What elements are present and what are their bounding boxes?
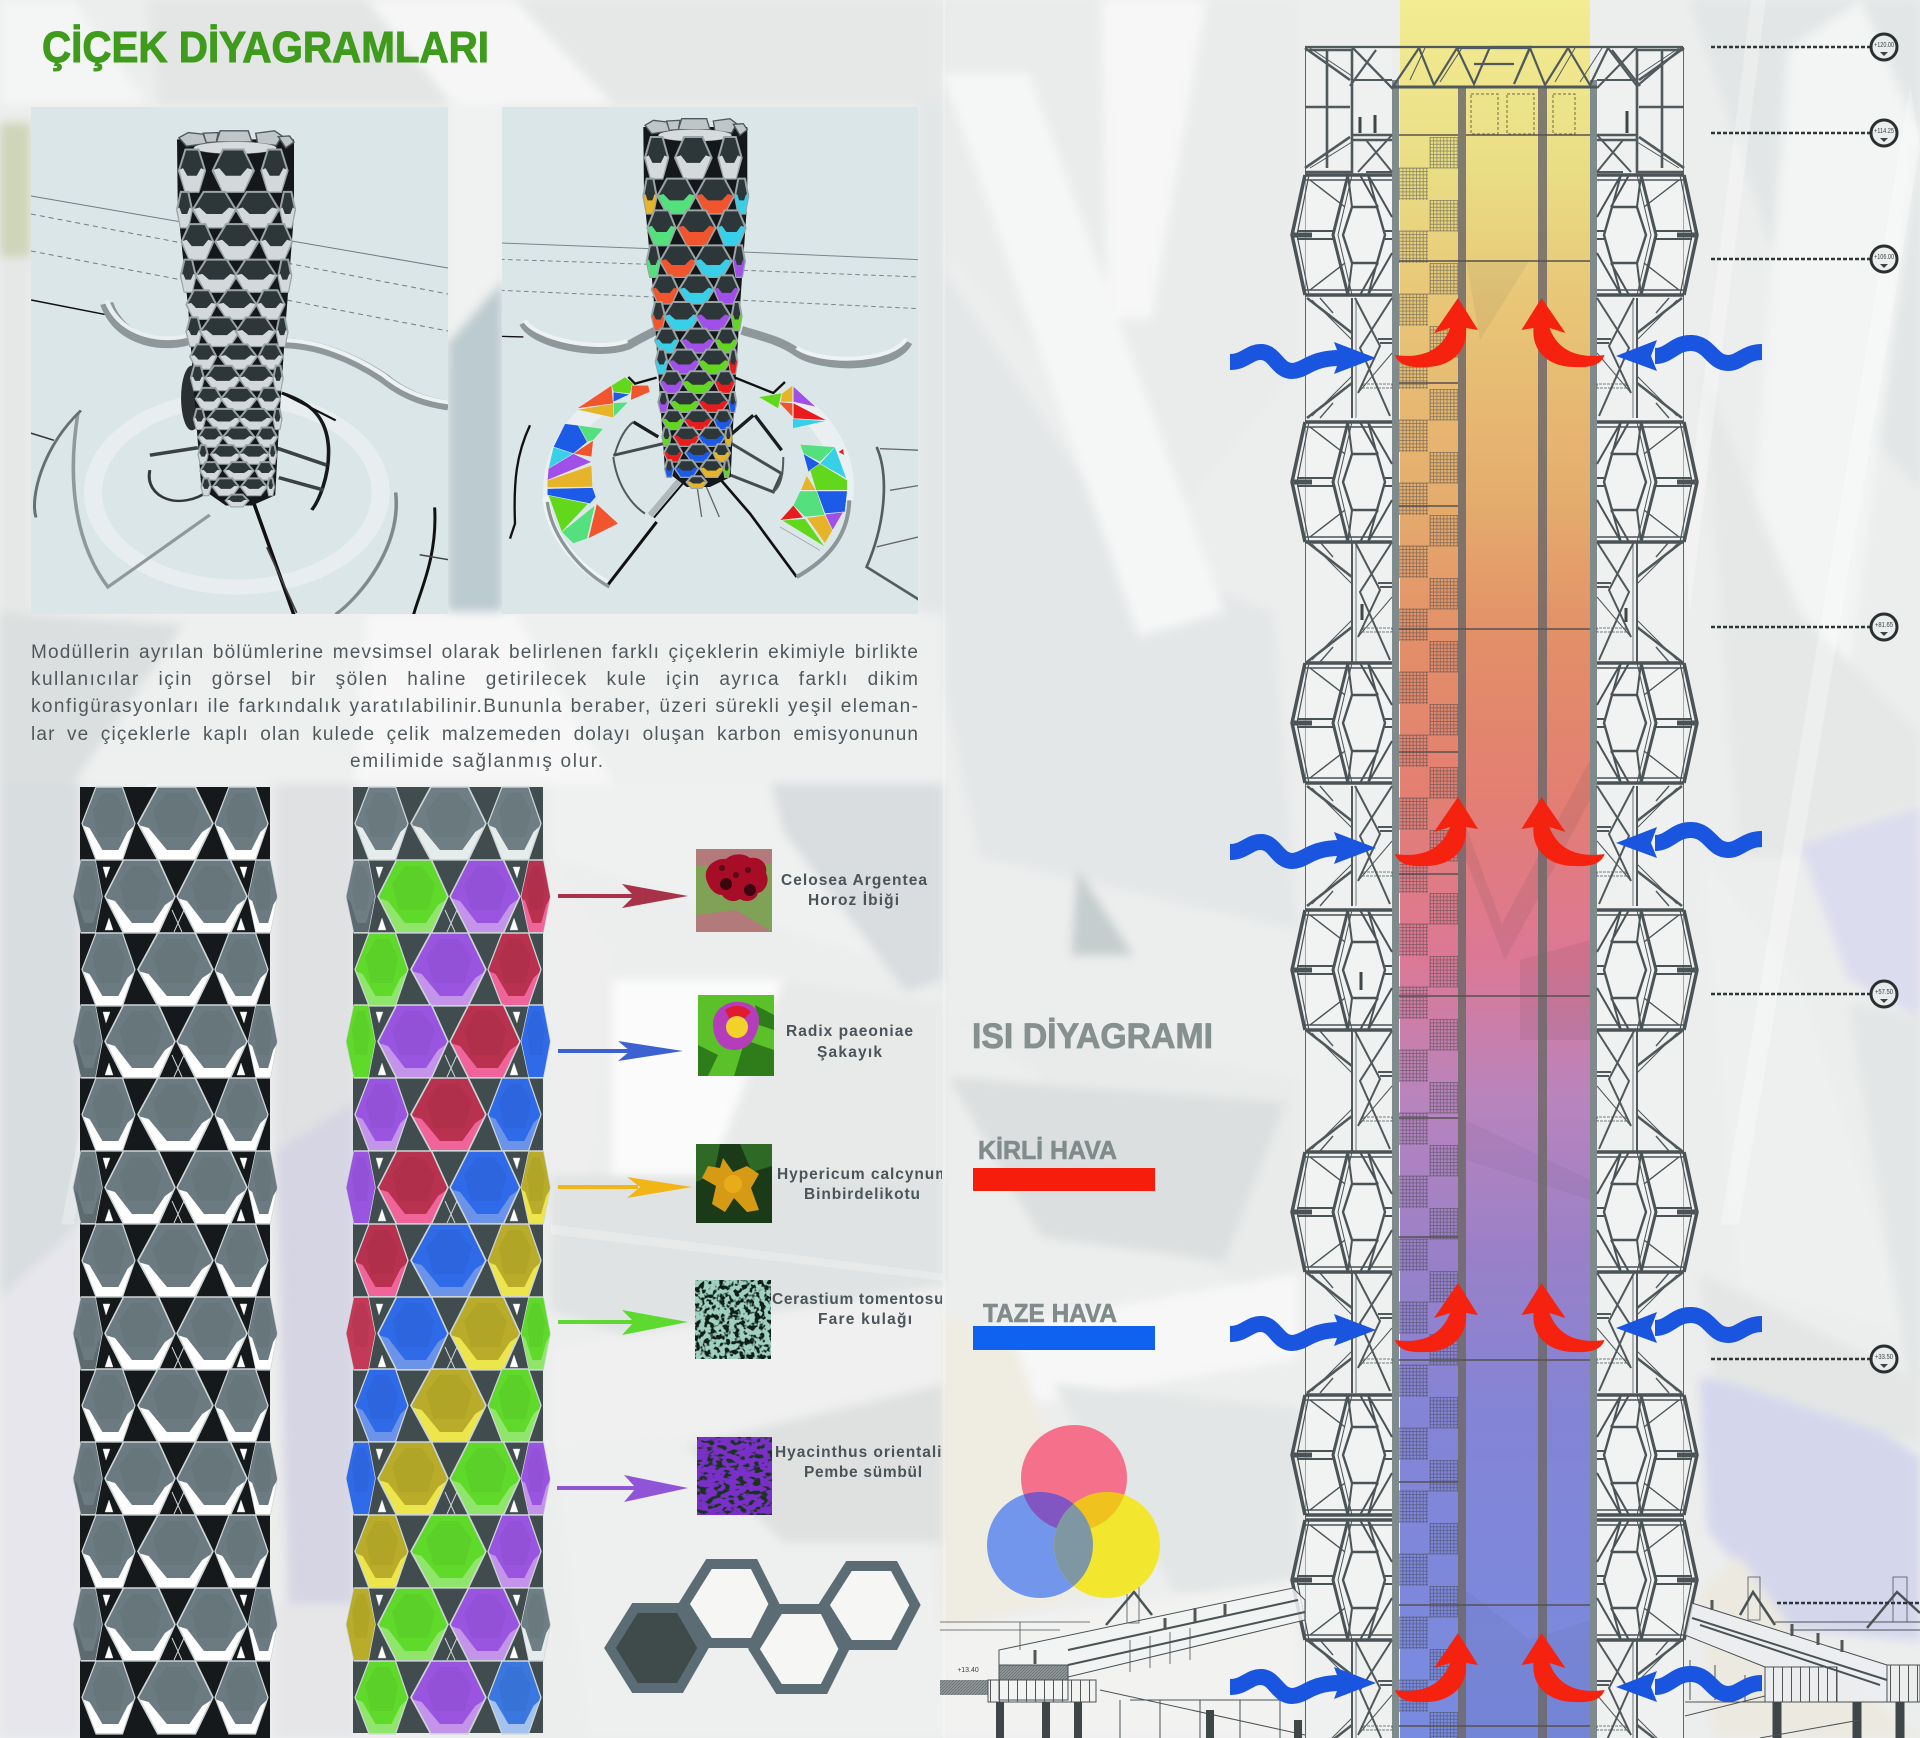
elevation markers: +81.65 [1875, 622, 1893, 629]
panel: plain tower render [30, 107, 448, 614]
legend: dirty air: KİRLİ HAVA [978, 1135, 1117, 1165]
flower labels: Horoz İbiği [808, 892, 899, 909]
heading: Isı Diyagramı: ISI DİYAGRAMI [972, 1017, 1213, 1056]
air flow arrows: hot air rising, right [1522, 298, 1604, 1702]
elevation markers: +33.50 [1875, 1354, 1893, 1361]
hex modules, left [1292, 175, 1392, 295]
elevation markers: +106.00 [1874, 254, 1894, 261]
description paragraph [31, 642, 918, 772]
elevation markers: +57.50 [1875, 989, 1893, 996]
tower, coloured version [643, 119, 748, 488]
coloured planting segments [547, 377, 847, 547]
legend: fresh air [973, 1298, 1155, 1350]
flower labels: Cerastium tomentosum [772, 1291, 958, 1308]
facade elevation: coloured planting modules [346, 787, 550, 1734]
elevation markers: +120.00 [1874, 42, 1894, 49]
flower photo: Cerastium [695, 1280, 771, 1359]
description paragraph: konfigürasyonları ile farkındalık yaratılabilinir.Bununla beraber, üzeri sürekli yeşil eleman- [31, 696, 918, 717]
legend: dirty air [973, 1135, 1155, 1191]
arrow: crimson to Celosea [558, 884, 688, 908]
description paragraph: kullanıcılar için görsel bir şölen haline getirilecek kule için ayrıca farklı dikim [31, 669, 918, 690]
flower labels: Fare kulağı [818, 1311, 912, 1328]
top frames [1305, 47, 1392, 172]
flower labels: Radix paeoniae [786, 1023, 913, 1040]
flower labels: Binbirdelikotu [804, 1186, 920, 1203]
flower labels: Hypericum calcynum [777, 1166, 949, 1183]
arrow: green to Cerastium [558, 1310, 688, 1335]
description paragraph: lar ve çiçeklerle kaplı olan kulede çelik malzemeden dolayı oluşan karbon emisyonunun [31, 724, 918, 745]
ground level: left terrace [940, 1575, 1305, 1738]
air flow arrows: fresh air in, right [1616, 340, 1762, 1702]
shadow shards seen through the heat column [1466, 260, 1590, 1738]
tower, silver version [177, 131, 295, 506]
section: tower structure [1292, 47, 1697, 1738]
air flow arrows: hot air rising, left [1395, 298, 1478, 1702]
elevation markers [1711, 34, 1920, 1603]
legend: fresh air: TAZE HAVA [983, 1298, 1117, 1328]
hexagon ornament [610, 1564, 915, 1689]
arrow: orange to Hypericum [558, 1177, 692, 1198]
flower labels [772, 872, 958, 1481]
stair grids [1399, 137, 1458, 1738]
description paragraph: emilimide sağlanmış olur. [350, 751, 603, 772]
facade elevation: plain modules [73, 787, 277, 1738]
flower photo: Radix paeoniae [698, 995, 774, 1076]
elevation tag at the left terrace: +13.40 [957, 1667, 979, 1674]
hex modules, right [1597, 175, 1697, 295]
arrow: blue to Radix [558, 1041, 683, 1061]
arrow: purple to Hyacinthus [557, 1475, 688, 1502]
flower photo: Hyacinthus [697, 1437, 772, 1515]
flower labels: Celosea Argentea [781, 872, 927, 889]
flower photo: Hypericum [696, 1144, 772, 1223]
roof truss [1305, 47, 1683, 88]
flower labels: Şakayık [817, 1044, 882, 1061]
elevation markers: +114.25 [1874, 128, 1894, 135]
air flow arrows: fresh air in, left [1230, 342, 1376, 1699]
description paragraph: Modüllerin ayrılan bölümlerine mevsimsel olarak belirlenen farklı çiçeklerin ekimiyle birlikte [31, 642, 918, 663]
ground level: right terrace [1685, 1577, 1920, 1738]
title: Çiçek Diyagramları: ÇİÇEK DİYAGRAMLARI [42, 23, 489, 72]
colour mixing circles [987, 1425, 1160, 1598]
flower labels: Hyacinthus orientalis [775, 1444, 951, 1461]
plan of the ground level, plain [30, 300, 448, 614]
flower photo: Celosea [696, 849, 772, 932]
panel: coloured planting tower render [500, 107, 920, 614]
flower labels: Pembe sümbül [804, 1464, 922, 1481]
section: heat column [1400, 0, 1590, 1738]
